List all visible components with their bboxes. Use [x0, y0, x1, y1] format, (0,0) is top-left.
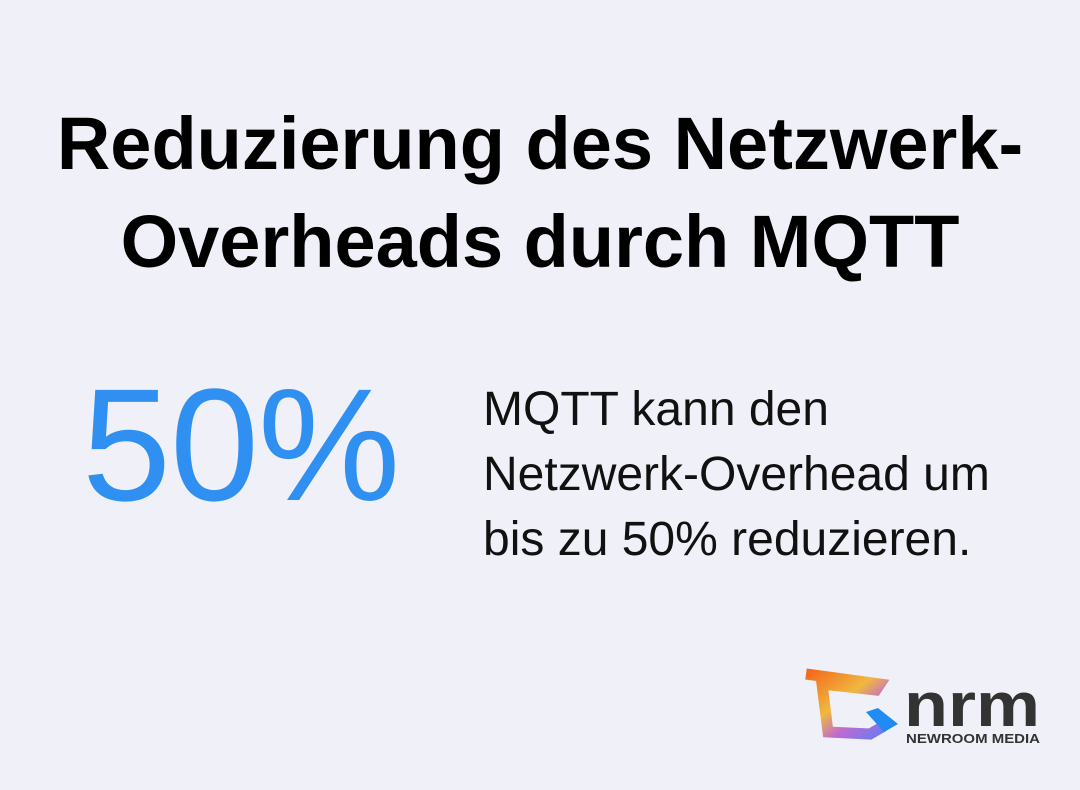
icon: logo mark: [806, 674, 898, 734]
title: Reduzierung des Netzwerk-: [57, 102, 1023, 185]
title: Overheads durch MQTT: [121, 200, 959, 283]
description text: bis zu 50% reduzieren.: [483, 513, 971, 566]
logo: newroom media: [805, 668, 1041, 746]
description text: Netzwerk-Overhead um: [483, 448, 990, 501]
logo text: nrm: [904, 671, 1040, 740]
statistic: 50%: 50%: [82, 355, 399, 534]
logo text: NEWROOM MEDIA: [906, 731, 1041, 746]
description text: MQTT kann den: [483, 383, 829, 436]
title: [57, 102, 1023, 283]
description text: [483, 383, 990, 566]
